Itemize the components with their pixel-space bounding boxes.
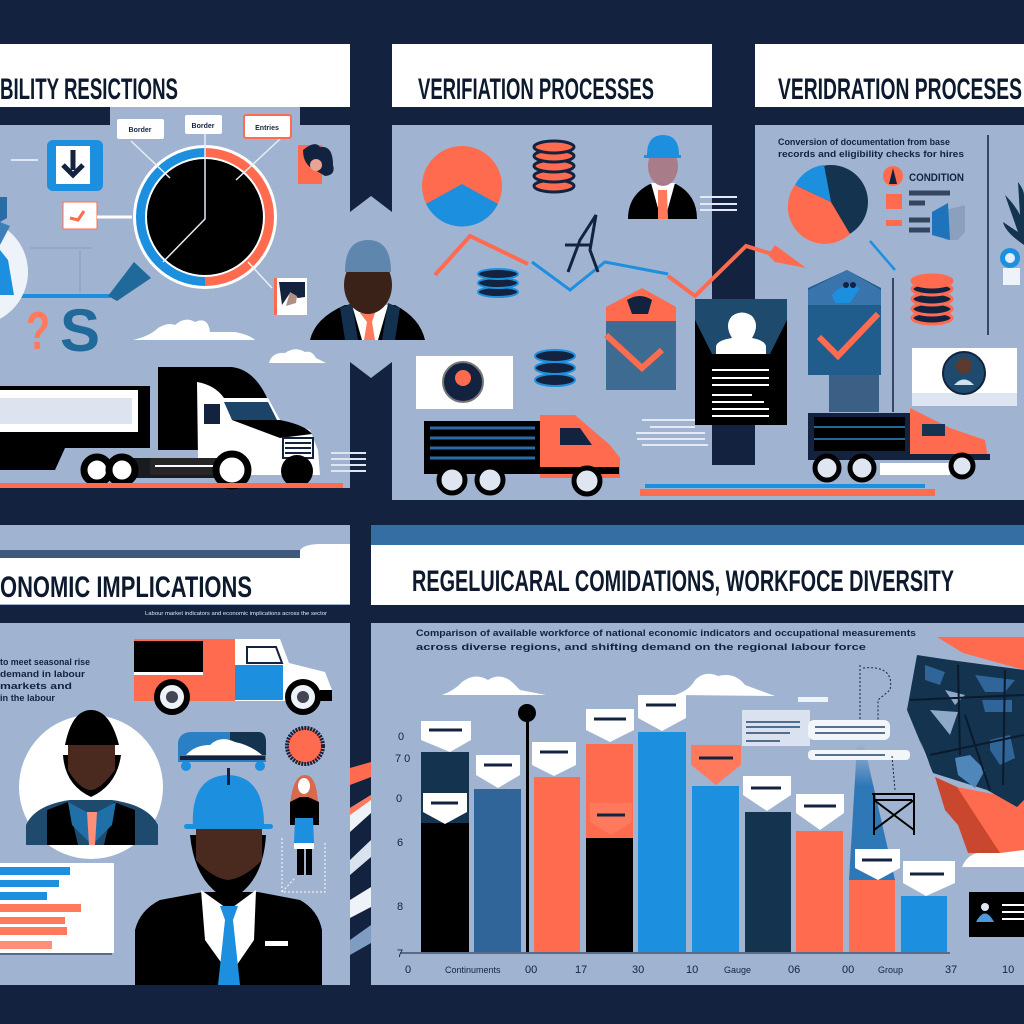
symbols: question mark and S: ? (26, 301, 50, 361)
axis labels: 0 (396, 793, 402, 805)
truck: orange and navy (808, 408, 990, 480)
icon: cloud truck (178, 732, 266, 771)
icon: database (912, 275, 952, 324)
symbols: question mark and S (26, 297, 100, 364)
arrow: orange trend (435, 236, 806, 296)
diagonal stripes (350, 762, 371, 955)
card: person icon (969, 892, 1024, 937)
divider (893, 135, 988, 412)
icon: download badge (47, 140, 103, 191)
axis labels: Continuments (445, 965, 501, 975)
axis labels: 7 0 (395, 753, 410, 765)
line: blue diagonal (870, 241, 895, 270)
bar tags (421, 695, 955, 896)
upper background: connected panel area (0, 107, 1024, 500)
icon: chair sketch (565, 215, 598, 272)
icon: database (534, 141, 574, 192)
symbols: question mark and S: S (60, 297, 100, 364)
icon: location pin (1000, 248, 1020, 285)
icon: orange badge (287, 728, 323, 764)
axis labels: 6 (397, 837, 403, 849)
donut labels: Entries (255, 125, 279, 132)
icon: plant (1003, 182, 1024, 245)
bar chart (400, 704, 950, 953)
donut labels (117, 115, 291, 139)
panel: verification processes (392, 44, 787, 494)
heading: mobility restrictions: BILITY RESICTIONS (0, 73, 178, 106)
person: worker with blue hat (628, 135, 697, 219)
axis labels: 37 (945, 964, 957, 976)
person: woman (282, 775, 325, 892)
icon: check card (63, 202, 132, 229)
small strip text: Labour market indicators and economic implications across the sector (145, 611, 327, 617)
card: check badge (808, 270, 881, 412)
card: profile document (695, 299, 787, 425)
person: worker with hard hat (310, 240, 425, 340)
person: worker with cap (19, 710, 163, 859)
panel: economic implications (0, 525, 371, 985)
floor stripes (640, 484, 935, 496)
axis labels: Group (878, 965, 903, 975)
text block: Comparison of available workforce of national economic indicators and occupational measurements (416, 628, 916, 638)
truck: black and white (0, 367, 343, 488)
person: man with hard hat (135, 768, 322, 985)
icon: portrait tile (298, 144, 334, 184)
axis labels: 8 (397, 901, 403, 913)
axis labels (395, 731, 1014, 976)
text block: in the labour (0, 693, 56, 703)
card: check badge (606, 288, 676, 390)
truck: delivery (134, 639, 332, 712)
text block: markets and (0, 681, 72, 691)
donut labels: Border (192, 123, 215, 130)
axis labels: 10 (686, 964, 698, 976)
icon: scaffold (872, 794, 915, 835)
axis labels: 7 (397, 948, 403, 960)
legend with icons (883, 166, 965, 240)
truck: orange and navy (424, 415, 620, 494)
text block: to meet seasonal rise (0, 657, 90, 667)
text block: across diverse regions, and shifting demand on the regional labour force (416, 642, 866, 652)
heading: veridration (755, 44, 1024, 107)
text cards (742, 665, 910, 790)
clouds (442, 674, 1024, 867)
axis labels: 10 (1002, 964, 1014, 976)
axis labels: 17 (575, 964, 587, 976)
card: portrait tile (416, 356, 513, 409)
pie chart (788, 165, 868, 244)
icon: database small top (478, 269, 518, 297)
text block: Conversion of documentation from base (778, 137, 950, 147)
map: united states (907, 637, 1024, 853)
heading: economic: ONOMIC IMPLICATIONS (0, 571, 252, 604)
heading: workforce (371, 525, 1024, 605)
heading: verification (392, 44, 712, 107)
axis labels: 0 (398, 731, 404, 743)
line chart: blue segment (532, 262, 668, 290)
panel: workforce diversity (371, 525, 1024, 985)
bar chart card (0, 863, 114, 954)
heading: economic (0, 525, 350, 605)
text block: demand in labour (0, 669, 86, 679)
donut chart (131, 134, 280, 289)
text lines (636, 197, 737, 445)
clouds (133, 320, 326, 363)
axis labels: 30 (632, 964, 644, 976)
text block (0, 657, 90, 703)
axis labels: Gauge (724, 965, 751, 975)
text lines near truck (11, 160, 366, 471)
donut labels: Border (129, 127, 152, 134)
legend with icons: CONDITION (909, 172, 964, 184)
icon: portrait tile lower (274, 278, 307, 315)
axis labels: 06 (788, 964, 800, 976)
pie chart (422, 146, 502, 227)
icon: globe (0, 197, 28, 325)
heading: verification: VERIFIATION PROCESSES (418, 73, 654, 106)
card: portrait tile (912, 348, 1017, 406)
axis labels: 00 (842, 964, 854, 976)
text block (416, 628, 916, 652)
text block: records and eligibility checks for hires (778, 149, 964, 159)
axis labels: 00 (525, 964, 537, 976)
text block (778, 137, 964, 159)
panel: mobility restrictions (0, 44, 366, 488)
connector: funnel line (20, 248, 151, 301)
heading: mobility restrictions (0, 44, 350, 107)
panel: veridration processes (640, 44, 1024, 496)
axis labels: 0 (405, 964, 411, 976)
icon: database small bottom (535, 350, 575, 386)
